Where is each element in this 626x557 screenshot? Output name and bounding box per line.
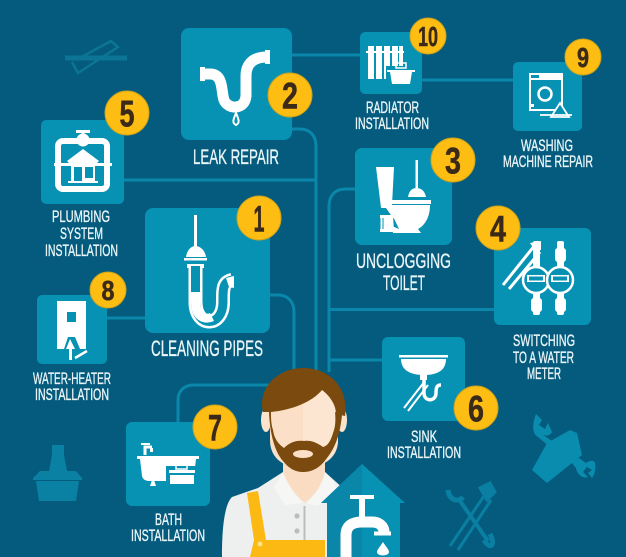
label: sink installation: INSTALLATION bbox=[387, 444, 461, 462]
label: water-heater installation bbox=[33, 370, 111, 404]
connector lines bbox=[107, 55, 513, 422]
icon: leaking pipe bbox=[200, 50, 270, 125]
label: washing machine repair bbox=[503, 137, 593, 171]
label: plumbing system installation: PLUMBING bbox=[52, 208, 110, 226]
label: radiator installation bbox=[355, 99, 429, 133]
decorative icon: hand with wrench bbox=[532, 414, 595, 483]
panel: washing machine bbox=[513, 39, 601, 131]
ears bbox=[261, 408, 271, 432]
face bbox=[270, 400, 338, 468]
icon: bath and toolbox bbox=[137, 443, 199, 487]
panel: water meter bbox=[476, 206, 591, 325]
label: washing machine repair: WASHING bbox=[521, 137, 573, 155]
label: unclogging toilet: TOILET bbox=[383, 272, 425, 295]
icon: plunger and pipe bbox=[184, 215, 234, 322]
label: unclogging toilet: UNCLOGGING bbox=[356, 250, 451, 273]
hair bbox=[262, 368, 346, 416]
label: bath installation bbox=[131, 511, 205, 545]
badge: 10: 10 bbox=[418, 21, 438, 52]
label: leak repair: LEAK REPAIR bbox=[193, 146, 279, 169]
panel: plumbing system bbox=[41, 91, 149, 204]
panel: unclogging toilet bbox=[355, 138, 475, 245]
panel: leak repair bbox=[181, 28, 312, 140]
collar bbox=[274, 472, 337, 506]
decorative icon: toolbox bbox=[33, 445, 82, 501]
label: bath installation: INSTALLATION bbox=[131, 527, 205, 545]
overalls bbox=[247, 491, 325, 557]
icon: radiator and toolbox bbox=[366, 46, 417, 86]
decorative icon: saw bbox=[65, 41, 127, 73]
badge: 7: 7 bbox=[208, 408, 222, 448]
plumber figure bbox=[222, 368, 347, 557]
label: switching to a water meter: TO A WATER bbox=[513, 349, 574, 367]
label: cleaning pipes: CLEANING PIPES bbox=[151, 336, 263, 361]
beard bbox=[269, 412, 342, 472]
badge: 5: 5 bbox=[120, 94, 134, 134]
label: switching to a water meter: SWITCHING bbox=[513, 332, 575, 350]
icon: water heater bbox=[57, 301, 87, 360]
label: sink installation: SINK bbox=[411, 428, 437, 446]
badge: 3: 3 bbox=[445, 140, 461, 182]
label: switching to a water meter: METER bbox=[527, 365, 561, 383]
badge: 6: 6 bbox=[468, 388, 484, 430]
label: plumbing system installation: SYSTEM bbox=[60, 225, 103, 243]
panel: cleaning pipes bbox=[145, 196, 281, 333]
neck bbox=[283, 462, 325, 503]
label: water-heater installation: WATER-HEATER bbox=[33, 370, 111, 388]
badge: 9: 9 bbox=[577, 42, 589, 73]
faucet bbox=[346, 497, 391, 557]
label: sink installation bbox=[387, 428, 461, 462]
icon: house with faucet bbox=[321, 464, 405, 557]
label: radiator installation: INSTALLATION bbox=[355, 115, 429, 133]
shirt bbox=[222, 472, 345, 557]
label: water-heater installation: INSTALLATION bbox=[35, 386, 109, 404]
icon: toilet with plunger bbox=[376, 160, 431, 233]
panel: bath bbox=[126, 405, 237, 506]
badge: 4: 4 bbox=[490, 208, 506, 250]
icon: sink with trap and pliers bbox=[399, 355, 448, 411]
label: plumbing system installation bbox=[45, 208, 118, 260]
icon: meters and wrench bbox=[503, 241, 573, 315]
label: plumbing system installation: INSTALLATION bbox=[45, 242, 118, 260]
icon: washing machine bbox=[529, 73, 572, 117]
badge: 2: 2 bbox=[282, 76, 298, 116]
decorative icon: crossed wrenches bbox=[448, 483, 495, 550]
icon: house with pipes bbox=[54, 130, 112, 189]
placket and buttons bbox=[304, 506, 306, 540]
label: switching to a water meter bbox=[513, 332, 575, 383]
label: radiator installation: RADIATOR bbox=[366, 99, 419, 117]
label: bath installation: BATH bbox=[155, 511, 182, 529]
label: unclogging toilet bbox=[356, 250, 451, 295]
badge: 1: 1 bbox=[254, 198, 264, 240]
panel: water heater bbox=[37, 272, 126, 364]
panel: radiator bbox=[360, 18, 446, 94]
badge: 8: 8 bbox=[102, 275, 114, 306]
panel: sink bbox=[382, 337, 498, 430]
